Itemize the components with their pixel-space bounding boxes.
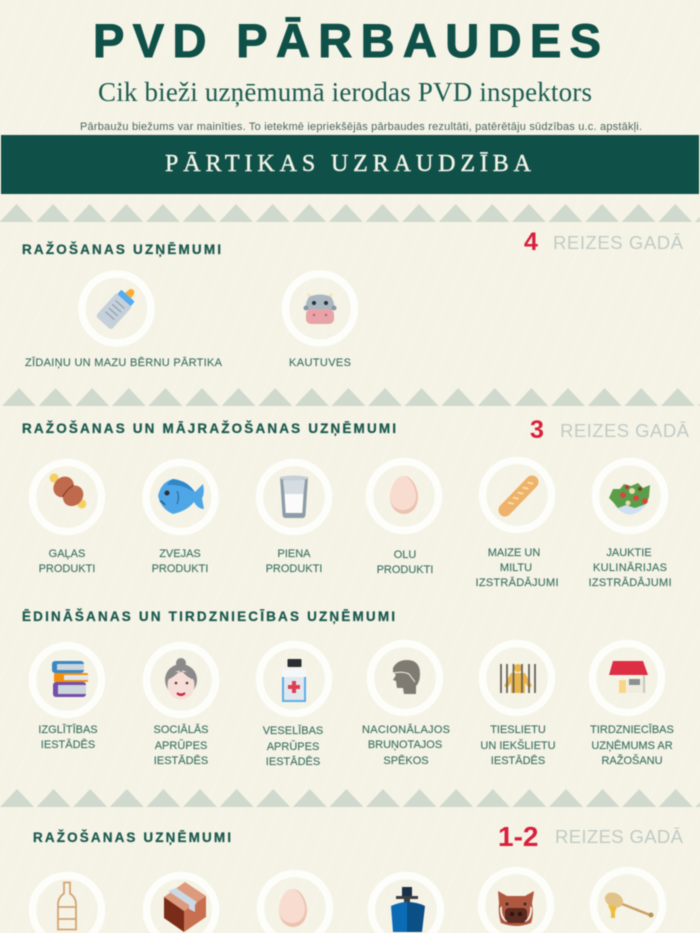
panel: 1-2 times a year [32, 821, 684, 933]
item: justice and interior: IESTĀDĒS [491, 755, 545, 767]
item: social care: APRŪPES [155, 740, 207, 752]
icon: elderly woman [165, 658, 197, 700]
item: justice and interior: UN IEKŠLIETU [480, 739, 556, 752]
frequency: 4 times a year: REIZES GADĀ [553, 232, 684, 253]
icon: fish [158, 479, 204, 514]
intro note: Pārbaužu biežums var mainīties. To ietekmē iepriekšējās pārbaudes rezultāti, patērētāju sūdzības u.c. apstākļi. [80, 121, 642, 133]
triangle divider 3 [0, 789, 700, 807]
icon: egg [390, 476, 418, 514]
item: health care: VESELĪBAS [263, 725, 323, 737]
item: egg products: OLU [394, 549, 416, 561]
heading: catering and retail companies: ĒDINĀŠANAS UN TIRDZNIECĪBAS UZŅĒMUMI [22, 609, 395, 624]
item: education: IZGLĪTĪBAS [38, 724, 98, 736]
item: retail with production: UZŅĒMUMS AR [591, 740, 673, 752]
item: bread and flour: MAIZE UN [488, 547, 540, 559]
item: mixed culinary: KULINĀRIJAS [593, 562, 667, 574]
frequency: 4 times a year: 4 [524, 228, 538, 256]
item: education [32, 646, 102, 751]
item: mixed culinary: JAUKTIE [606, 547, 652, 559]
item: armed forces: NACIONĀLAJOS [362, 724, 450, 736]
item: bread and flour: IZSTRĀDĀJUMI [476, 577, 558, 589]
icon: boar [498, 891, 534, 926]
item: infant food [25, 274, 223, 369]
item: fish products [146, 462, 215, 575]
item: eggs [260, 874, 330, 933]
frequency: 3 times a year: REIZES GADĀ [560, 420, 690, 441]
item: infant food: ZĪDAIŅU UN MAZU BĒRNU PĀRTIKA [25, 357, 223, 369]
triangle divider 2 [0, 388, 700, 406]
item: honey [594, 870, 662, 933]
item: retail with production [590, 644, 674, 767]
panel: 3 times a year, production [22, 416, 690, 589]
frequency: 4 times a year [524, 228, 684, 256]
item: milk products [260, 462, 328, 575]
heading: manufacturing companies: RAŽOŠANAS UZŅĒMUMI [22, 242, 221, 257]
frequency: 1-2 times a year [498, 821, 684, 852]
item: milk products: PRODUKTI [266, 563, 322, 575]
item: fish products: ZVEJAS [159, 548, 201, 560]
item: social care: IESTĀDĒS [154, 755, 208, 767]
item: meat products: GAĻAS [49, 548, 85, 560]
item: slaughterhouses: KAUTUVES [289, 357, 351, 369]
icon: bottle outline [58, 882, 76, 930]
icon: books [52, 661, 88, 697]
item: fish products: PRODUKTI [152, 563, 208, 575]
item: milk products: PIENA [277, 548, 311, 560]
item: armed forces [362, 644, 450, 767]
item: education: IESTĀDĒS [41, 739, 95, 751]
item: justice and interior [480, 644, 556, 767]
panel: 4 times a year [22, 228, 684, 369]
icon: soldier head [393, 660, 420, 694]
icon: medicine bottle [282, 659, 306, 702]
title: PVD PĀRBAUDES [93, 14, 601, 67]
item: mixed culinary: IZSTRĀDĀJUMI [588, 577, 672, 589]
icon: cow [304, 293, 336, 324]
item: justice and interior: TIESLIETU [490, 724, 546, 736]
item: health care: IESTĀDĒS [266, 756, 320, 768]
icon: baby bottle [95, 283, 141, 330]
item: packaging [146, 876, 216, 933]
item: bread and flour [476, 460, 558, 589]
item: armed forces: BRUŅOTAJOS [368, 739, 442, 751]
item: bread and flour: MILTU [500, 562, 532, 574]
banner: food supervision [1, 135, 699, 194]
frequency: 3 times a year: 3 [530, 416, 544, 444]
item: health care [260, 644, 328, 768]
item: slaughterhouses [286, 274, 354, 369]
icon: meat [43, 467, 93, 515]
item: armed forces: SPĒKOS [383, 755, 429, 767]
icon: egg [279, 889, 307, 927]
icon: honey dipper [602, 890, 654, 918]
subtitle: Cik bieži uzņēmumā ierodas PVD inspektors [98, 77, 592, 107]
icon: salad [609, 483, 650, 514]
item: mixed culinary [588, 462, 672, 589]
item: game meat [482, 870, 550, 933]
banner heading: PĀRTIKAS UZRAUDZĪBA [165, 151, 532, 177]
item: social care [146, 646, 216, 767]
icon: prisoner behind bars [501, 664, 535, 693]
item: retail with production: TIRDZNIECĪBAS [590, 724, 674, 736]
panel: catering and retail [22, 609, 674, 768]
heading: manufacturing companies: RAŽOŠANAS UZŅĒMUMI [33, 830, 231, 845]
item: alcoholic drinks [32, 876, 102, 933]
item: meat products [32, 462, 102, 575]
heading: manufacturing and home production: RAŽOŠANAS UN MĀJRAŽOŠANAS UZŅĒMUMI [22, 421, 396, 436]
item: meat products: PRODUKTI [39, 563, 95, 575]
item: social care: SOCIĀLĀS [153, 724, 209, 736]
item: retail with production: RAŽOŠANU [601, 754, 663, 767]
item: ship [372, 876, 440, 933]
item: egg products [370, 462, 438, 576]
frequency: 3 times a year [530, 416, 690, 444]
icon: cardboard box [164, 882, 206, 932]
frequency: 1-2 times a year: 1-2 [498, 821, 538, 852]
icon: shop [609, 661, 648, 693]
icon: ship [391, 887, 425, 932]
frequency: 1-2 times a year: REIZES GADĀ [555, 826, 684, 847]
item: egg products: PRODUKTI [377, 564, 433, 576]
item: health care: APRŪPES [267, 741, 319, 753]
icon: glass of milk [280, 476, 308, 518]
triangle divider 1 [0, 204, 700, 222]
icon: baguette [496, 473, 541, 519]
